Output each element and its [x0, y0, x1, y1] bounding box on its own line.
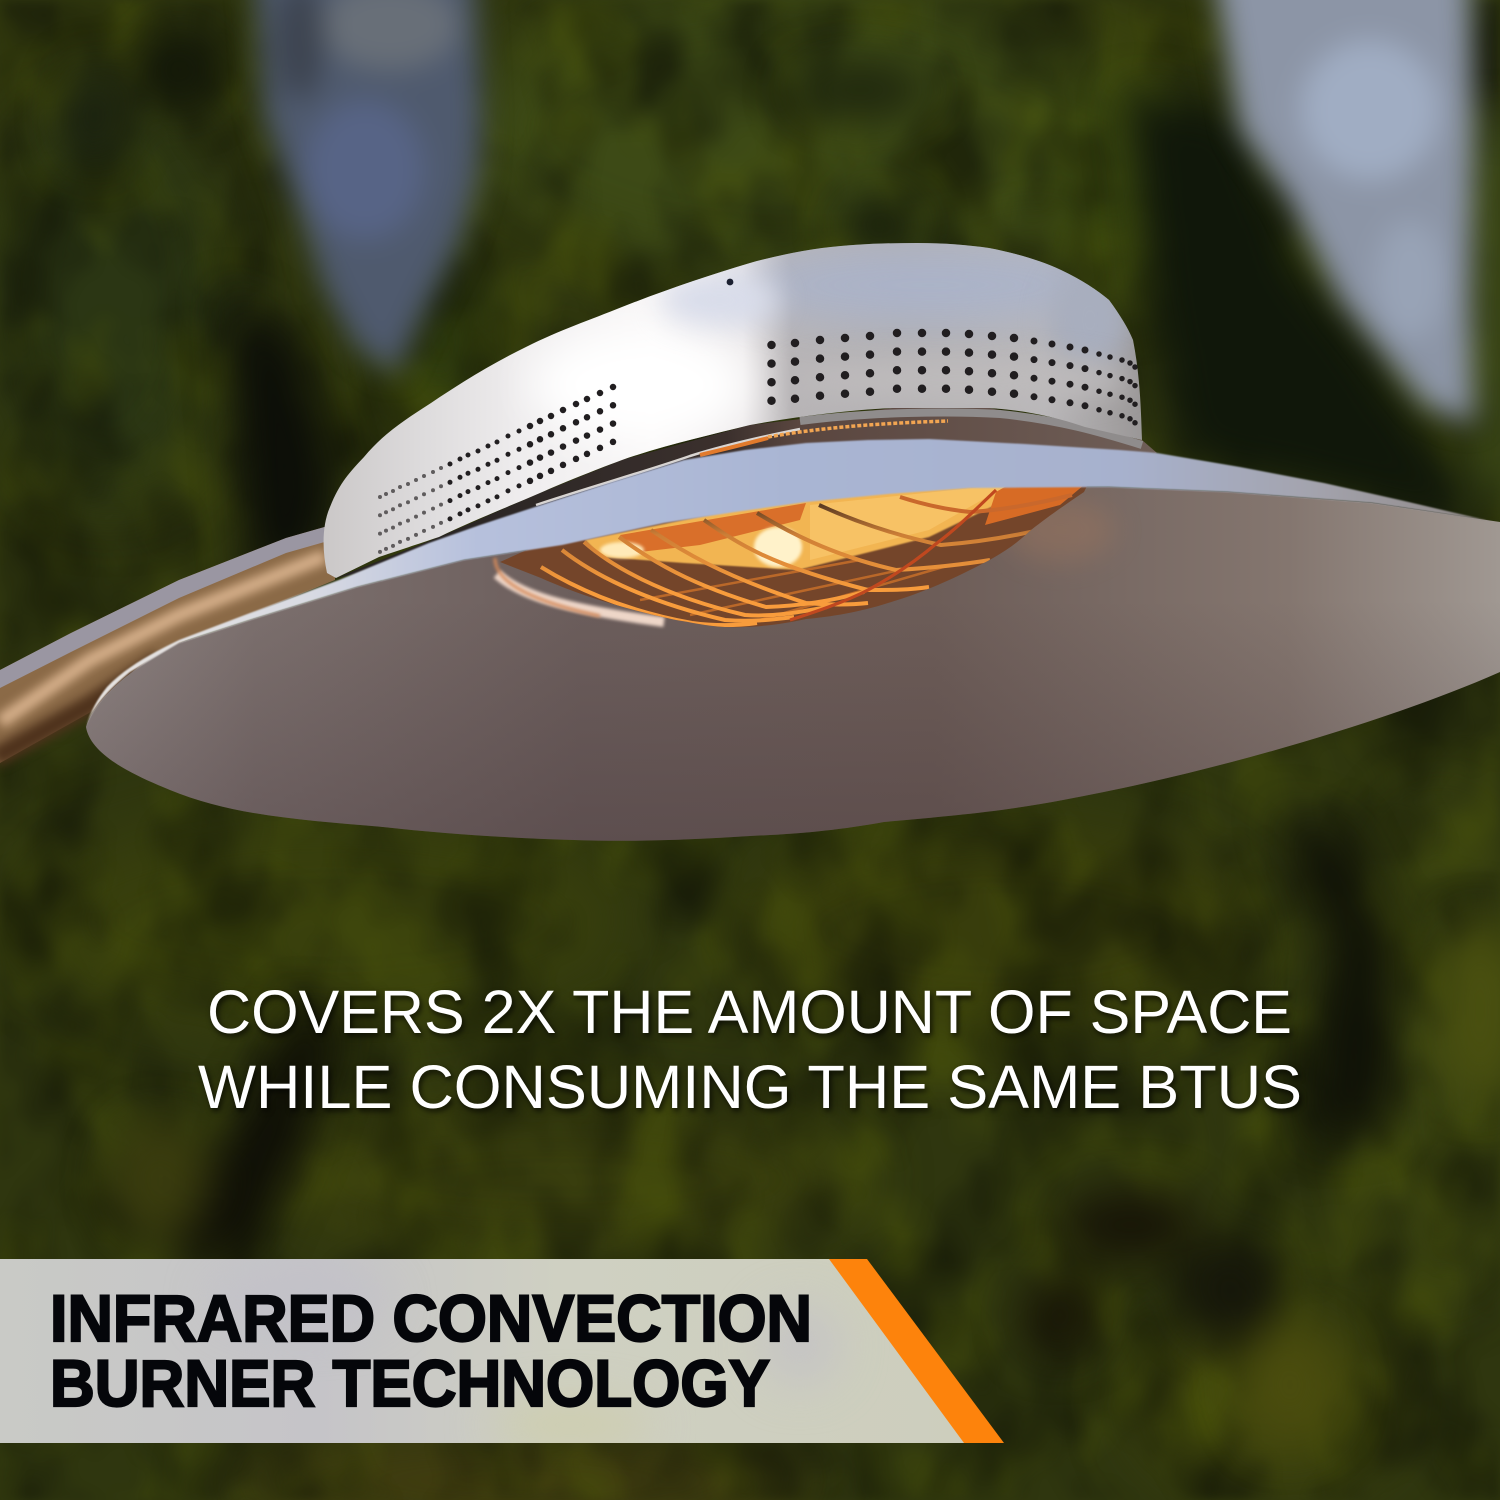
dark gap and collar below dome	[336, 408, 1157, 578]
shade rim	[86, 439, 1490, 727]
heater arm	[0, 524, 335, 763]
burner	[500, 486, 1086, 628]
dark tree shapes	[1125, 90, 1480, 530]
perforations right	[380, 333, 1135, 553]
burner glow around opening	[1005, 498, 1115, 562]
heater lamp	[86, 230, 1500, 841]
headline text: WHILE CONSUMING THE SAME BTUS	[198, 1053, 1302, 1121]
banner panel	[0, 1259, 966, 1449]
headline text	[198, 978, 1302, 1121]
banner title: BURNER TECHNOLOGY	[50, 1346, 770, 1420]
orange accent stripe	[829, 1259, 1004, 1443]
opening highlight	[497, 574, 664, 622]
sky gaps	[250, 0, 482, 375]
wire guard	[541, 495, 1072, 625]
dome housing	[324, 243, 1142, 578]
shade underside	[86, 487, 1500, 841]
perforations left	[530, 387, 613, 482]
banner title: INFRARED CONVECTION	[50, 1281, 812, 1355]
headline text: COVERS 2X THE AMOUNT OF SPACE	[207, 978, 1292, 1046]
top hole	[727, 279, 733, 285]
banner	[0, 1259, 1004, 1449]
banner title	[50, 1281, 812, 1420]
